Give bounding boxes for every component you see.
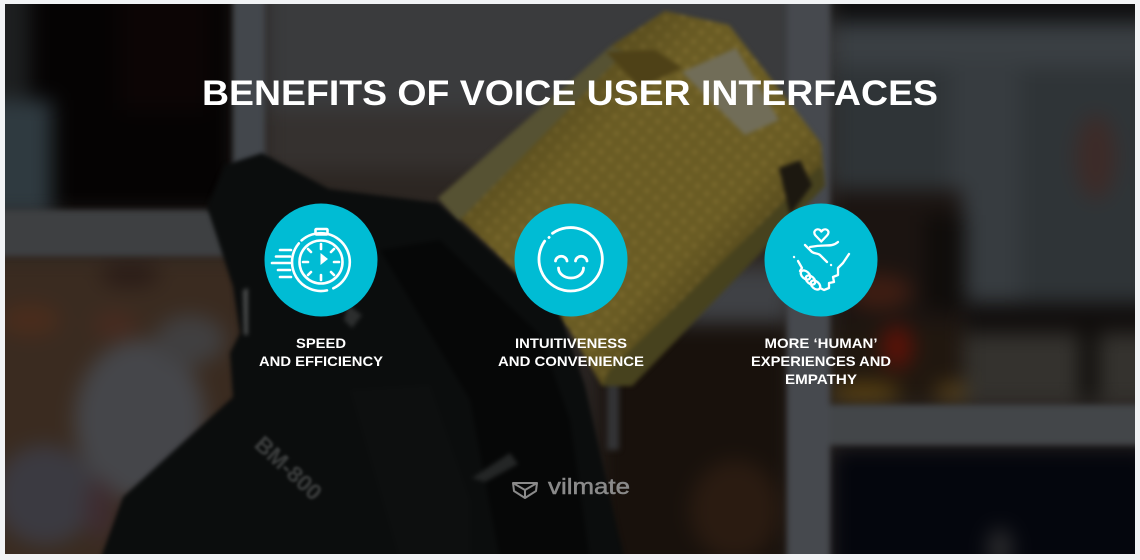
icon: stopwatch bbox=[264, 204, 378, 316]
icon: smiling face bbox=[514, 204, 628, 316]
label: and convenience: AND CONVENIENCE bbox=[498, 353, 644, 369]
logo wordmark: vilmate bbox=[548, 474, 630, 499]
label: intuitiveness: INTUITIVENESS bbox=[515, 335, 627, 351]
icon: vilmate envelope mark bbox=[513, 483, 537, 498]
benefit: intuitiveness and convenience bbox=[498, 204, 644, 369]
logo: vilmate bbox=[513, 474, 630, 499]
microphone brand mark: BM-800 bbox=[250, 431, 327, 506]
label: experiences and: EXPERIENCES AND bbox=[751, 353, 891, 369]
label: empathy: EMPATHY bbox=[785, 371, 858, 387]
icon: handshake with heart bbox=[764, 204, 878, 316]
label: and efficiency: AND EFFICIENCY bbox=[259, 353, 384, 369]
label: more human: MORE ‘HUMAN’ bbox=[764, 335, 878, 351]
microphone body bbox=[100, 153, 625, 560]
benefit: more human experiences and empathy bbox=[751, 204, 891, 387]
benefit: speed and efficiency bbox=[259, 204, 384, 369]
label: speed: SPEED bbox=[296, 335, 346, 351]
microphone head bbox=[438, 11, 825, 386]
title: BENEFITS OF VOICE USER INTERFACES bbox=[202, 74, 938, 113]
